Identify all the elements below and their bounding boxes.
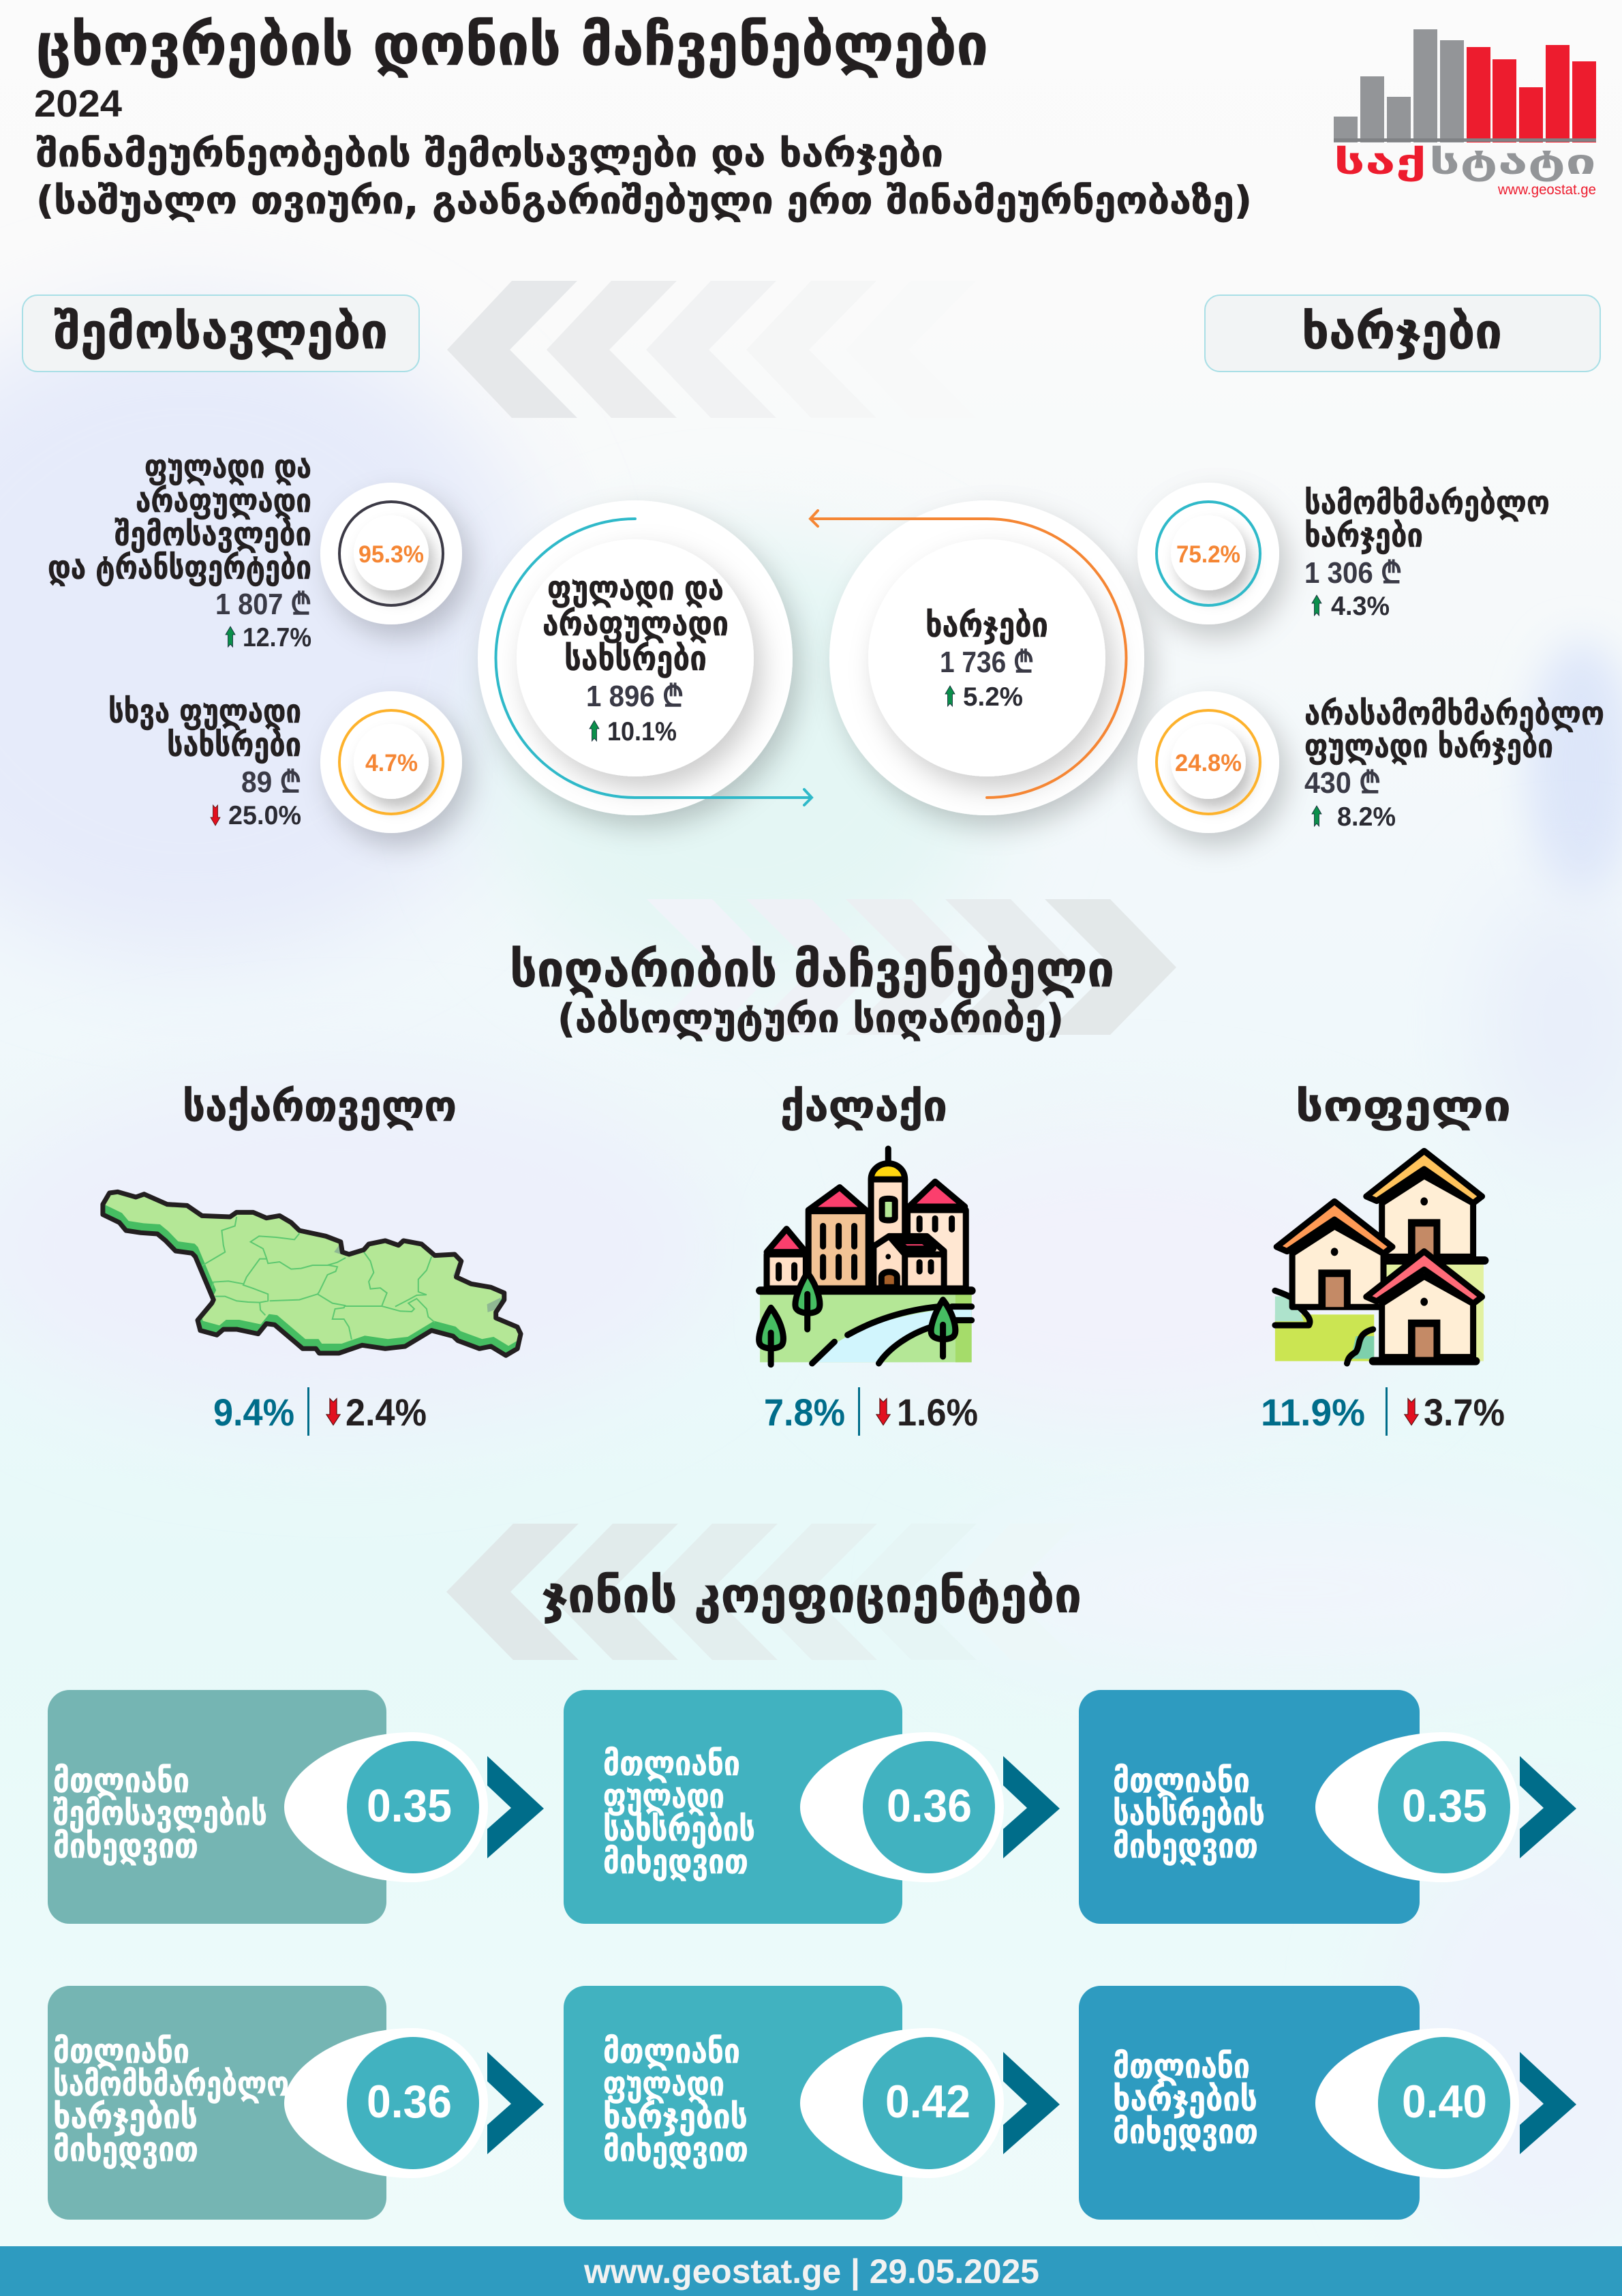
- chevrons: Gini: [446, 1524, 1076, 1660]
- gini card: total expenditure: [1079, 1986, 1576, 2220]
- heading: Georgia: საქართველო: [183, 1081, 457, 1131]
- gini card: total cash means: [564, 1690, 1060, 1924]
- gini card: total expenditure: მიხედვით: [1113, 2112, 1258, 2151]
- circle: expenditure: 1 736 ₾: [940, 646, 1034, 679]
- circle: expenditure: [829, 500, 1144, 815]
- heading: Gini coefficients: ჯინის კოეფიციენტები: [542, 1567, 1082, 1624]
- gini card: consumer expenditure: მთლიანი: [53, 2031, 189, 2071]
- gini card: total expenditure: მთლიანი: [1113, 2046, 1250, 2086]
- stat: Georgia poverty: 9.4%: [213, 1391, 294, 1434]
- panel: income heading: შემოსავლები: [54, 303, 388, 360]
- year: 2024: [34, 82, 122, 125]
- gini card: total cash means: სახსრების: [603, 1809, 755, 1849]
- text: cash and non-cash income and transfers: [48, 448, 311, 652]
- map: Georgia: [98, 1182, 527, 1359]
- stat: urban poverty: 1.6%: [897, 1391, 978, 1434]
- circle: expenditure: 5.2%: [963, 682, 1023, 712]
- text: non-consumer cash expenditure: 430 ₾: [1304, 766, 1381, 800]
- circle: consumer expenditure share: [1137, 483, 1279, 624]
- gini card: total income: [48, 1690, 544, 1924]
- gini card: consumer expenditure: სამომხმარებლო: [53, 2064, 289, 2104]
- gini card: total cash means: 0.36: [887, 1780, 972, 1832]
- heading: urban: ქალაქი: [780, 1081, 947, 1131]
- circle: consumer expenditure share: 75.2%: [1176, 541, 1240, 568]
- gini card: total means: მიხედვით: [1113, 1826, 1258, 1866]
- subtitle line 1: შინამეურნეობების შემოსავლები და ხარჯები: [36, 132, 943, 176]
- text: other cash income: სახსრები: [167, 726, 301, 764]
- gini card: cash expenditure: [564, 1986, 1060, 2220]
- gini card: total income: მიხედვით: [53, 1826, 198, 1866]
- circle: other cash income share: [320, 691, 462, 833]
- stat: rural poverty: 11.9%: [1261, 1391, 1365, 1434]
- gini card: consumer expenditure: ხარჯების: [53, 2097, 198, 2136]
- text: cash and non-cash income and transfers: და ტრანსფერტები: [48, 549, 311, 587]
- gini card: total income: შემოსავლების: [53, 1794, 267, 1833]
- panel: expenditure heading: ხარჯები: [1302, 303, 1502, 360]
- subtitle line 2: (საშუალო თვიური, გაანგარიშებული ერთ შინამეურნეობაზე): [36, 179, 1252, 223]
- stat: urban poverty: [764, 1387, 978, 1436]
- icon: city: [759, 1149, 972, 1365]
- circle: cash and non-cash means: ფულადი და: [547, 569, 724, 608]
- circle: cash and non-cash means: 10.1%: [607, 717, 677, 746]
- text: cash and non-cash income and transfers: 12.7%: [243, 623, 311, 652]
- text: cash and non-cash income and transfers: ფულადი და: [144, 448, 311, 486]
- circle: other cash income share: 4.7%: [365, 750, 418, 776]
- text: other cash income: სხვა ფულადი: [108, 693, 301, 731]
- chevrons: top: [447, 281, 976, 418]
- stat: urban poverty: 7.8%: [764, 1391, 845, 1434]
- text: cash and non-cash income and transfers: შემოსავლები: [114, 515, 311, 554]
- text: non-consumer cash expenditure: [1304, 695, 1604, 832]
- gini card: consumer expenditure: მიხედვით: [53, 2130, 198, 2169]
- circle: non-consumer expenditure share: [1137, 691, 1279, 833]
- footer: www.geostat.ge | 29.05.2025: [583, 2252, 1039, 2291]
- gini card: total income: 0.35: [367, 1780, 452, 1832]
- circle: cash and non-cash means: სახსრები: [564, 639, 707, 678]
- logo: geostat: www.geostat.ge: [1497, 182, 1596, 198]
- gini card: total income: მთლიანი: [53, 1761, 189, 1800]
- panel: expenditure heading: [1205, 295, 1600, 372]
- text: other cash income: 25.0%: [228, 801, 301, 830]
- gini card: total means: [1079, 1690, 1576, 1924]
- stat: rural poverty: [1261, 1387, 1505, 1436]
- text: consumer expenditure: სამომხმარებლო: [1304, 484, 1550, 522]
- text: non-consumer cash expenditure: 8.2%: [1337, 802, 1396, 832]
- text: consumer expenditure: ხარჯები: [1304, 517, 1423, 555]
- text: non-consumer cash expenditure: ფულადი ხარჯები: [1304, 727, 1553, 766]
- circle: expenditure: ხარჯები: [925, 605, 1048, 645]
- gini card: cash expenditure: 0.42: [885, 2076, 970, 2128]
- chevrons: poverty: [647, 899, 1176, 1035]
- text: cash and non-cash income and transfers: არაფულადი: [136, 482, 311, 520]
- title: ცხოვრების დონის მაჩვენებლები: [36, 12, 988, 78]
- text: consumer expenditure: 1 306 ₾: [1304, 556, 1402, 590]
- stat: Georgia poverty: [213, 1387, 427, 1436]
- footer: [0, 2246, 1622, 2296]
- heading: rural: სოფელი: [1296, 1081, 1511, 1131]
- gini card: cash expenditure: მთლიანი: [603, 2031, 740, 2071]
- circle: cash and non-cash income share: [320, 483, 462, 624]
- gini card: total cash means: მთლიანი: [603, 1744, 740, 1783]
- gini card: total means: 0.35: [1402, 1780, 1487, 1832]
- gini card: consumer expenditure: 0.36: [367, 2076, 452, 2128]
- logo: geostat: საქ: [1334, 142, 1426, 182]
- heading: poverty indicator: სიღარიბის მაჩვენებელი: [510, 941, 1114, 999]
- gini card: total cash means: მიხედვით: [603, 1842, 748, 1882]
- icon: village: [1275, 1151, 1484, 1363]
- text: consumer expenditure: 4.3%: [1331, 592, 1390, 621]
- circle: cash and non-cash income share: 95.3%: [358, 541, 424, 568]
- gini card: total means: სახსრების: [1113, 1794, 1265, 1833]
- gini card: cash expenditure: მიხედვით: [603, 2130, 748, 2169]
- text: other cash income: [108, 693, 301, 830]
- gini card: total cash means: ფულადი: [603, 1777, 724, 1816]
- panel: income heading: [22, 295, 419, 372]
- gini card: cash expenditure: ფულადი: [603, 2064, 724, 2104]
- logo: geostat: სტატი: [1429, 142, 1596, 182]
- stat: Georgia poverty: 2.4%: [346, 1391, 427, 1434]
- circle: cash and non-cash means: 1 896 ₾: [586, 680, 684, 713]
- text: consumer expenditure: [1304, 484, 1550, 621]
- arrow: teal arc: [496, 519, 812, 805]
- circle: non-consumer expenditure share: 24.8%: [1175, 750, 1242, 776]
- logo: geostat: [1334, 29, 1596, 198]
- gini card: cash expenditure: ხარჯების: [603, 2097, 748, 2136]
- circle: cash and non-cash means: არაფულადი: [542, 604, 729, 644]
- text: other cash income: 89 ₾: [241, 766, 301, 799]
- gini card: total expenditure: ხარჯების: [1113, 2079, 1257, 2119]
- circle: cash and non-cash means: [478, 500, 793, 815]
- gini card: consumer expenditure: [48, 1986, 544, 2220]
- gini card: total means: მთლიანი: [1113, 1761, 1250, 1800]
- heading: absolute poverty: (აბსოლუტური სიღარიბე): [557, 995, 1064, 1042]
- arrow: orange arc: [810, 511, 1126, 798]
- gini card: total expenditure: 0.40: [1402, 2076, 1487, 2128]
- text: cash and non-cash income and transfers: 1 807 ₾: [215, 588, 311, 621]
- stat: rural poverty: 3.7%: [1424, 1391, 1505, 1434]
